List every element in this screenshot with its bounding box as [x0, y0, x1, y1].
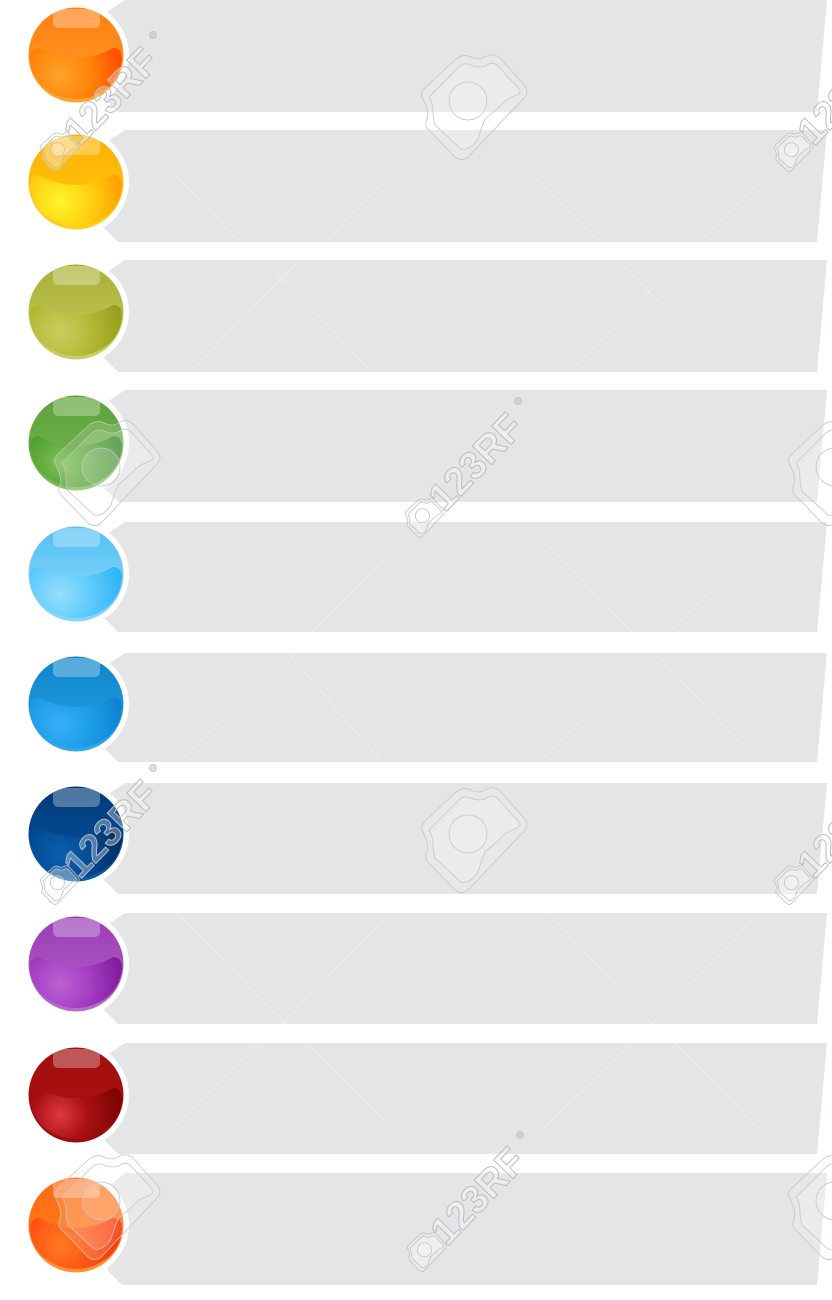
watermark: large camera 6 [788, 1155, 832, 1260]
ball 2: yellow [23, 129, 129, 235]
panel: bar 6 [104, 653, 827, 762]
ball 7: navy [23, 781, 129, 887]
watermark: 123RF logo 5 [774, 773, 832, 904]
watermark: 123RF logo 4: 123RF [56, 773, 167, 886]
panel: bar 5 [104, 522, 827, 632]
panel: bar 8 [104, 913, 827, 1024]
panel: bar 4 [104, 390, 827, 502]
ball 10: red orange [23, 1172, 129, 1278]
ball 4: green [23, 390, 129, 496]
panel: bar 7 [104, 783, 827, 894]
ball 6: blue [23, 651, 129, 757]
ball 3: olive [23, 259, 129, 365]
watermark: large camera 2 [421, 788, 527, 893]
watermark: large camera 3 [54, 421, 160, 526]
panel: bar 3 [104, 260, 827, 372]
panel: bar 1 [104, 0, 827, 112]
ball 1: orange [23, 2, 129, 108]
watermark: 123RF logo 6: 123RF [423, 1140, 534, 1253]
watermark: large camera 4 [54, 1155, 160, 1260]
panel: bar 9 [104, 1043, 827, 1154]
ball 8: purple [23, 911, 129, 1017]
watermark: 123RF logo 2: 123RF [421, 406, 532, 519]
panel: bar 2 [104, 130, 827, 242]
ball 9: dark red [23, 1042, 129, 1148]
watermark: large camera 1 [421, 55, 527, 160]
watermark: 123RF logo 3 [774, 40, 832, 171]
ball 5: light blue [23, 521, 129, 627]
watermark: 123RF logo 1: 123RF [56, 40, 167, 153]
watermark: large camera 5 [788, 421, 832, 526]
panel: bar 10 [108, 1173, 827, 1285]
